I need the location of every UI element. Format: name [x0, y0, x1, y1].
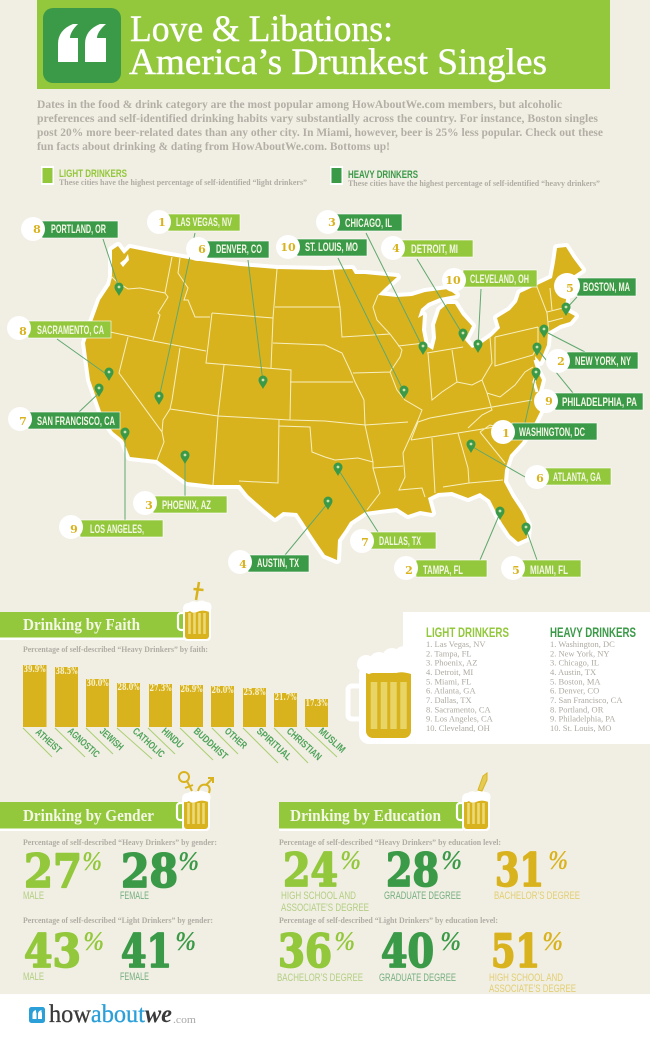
heavy drinkers list: 8. Portland, OR	[550, 704, 604, 714]
label: Atlanta: 6	[536, 472, 544, 485]
stat: 51% high school: %	[542, 926, 563, 956]
label: Phoenix: PHOENIX, AZ	[162, 500, 211, 512]
section heading: drinking by faith: Drinking by Faith	[23, 615, 140, 634]
stat: 51% high school: ASSOCIATE’S DEGREE	[489, 983, 576, 995]
section heading: drinking by gender: Drinking by Gender	[23, 806, 154, 825]
label: Chicago	[316, 210, 402, 234]
label: Austin: AUSTIN, TX	[257, 558, 299, 570]
stat: 36% bachelor: BACHELOR’S DEGREE	[277, 972, 363, 984]
stat: 43% male: 43	[24, 924, 81, 978]
faith subtitle: Percentage of self-described “Heavy Drinkers” by faith:	[23, 645, 208, 654]
bar chart: drinking by faith: 27.3%	[150, 684, 172, 694]
stat: 28% graduate: %	[441, 845, 462, 875]
legend: light drinkers	[41, 166, 307, 187]
stat: 43% male: %	[83, 926, 104, 956]
Chesapeake Bay	[534, 360, 538, 392]
label: San Francisco: 7	[19, 415, 27, 428]
heavy drinkers list: 7. San Francisco, CA	[550, 695, 623, 705]
heavy drinkers list	[550, 624, 636, 733]
stat: 51% high school: 51	[491, 924, 540, 978]
heavy drinkers list: 6. Denver, CO	[550, 686, 599, 696]
stat: 27% male: %	[82, 846, 102, 876]
label: Austin	[228, 550, 309, 574]
label: Dallas: 7	[361, 536, 369, 549]
stat: 40% graduate: 40	[381, 924, 434, 978]
label: Denver	[186, 237, 269, 261]
label: Dallas	[350, 529, 436, 553]
label: Sacramento: SACRAMENTO, CA	[37, 325, 104, 337]
stat: 28% female: %	[178, 846, 199, 876]
stat: 41% female: 41	[121, 924, 172, 978]
map of the United States	[85, 246, 582, 560]
stat: 31% bachelor: %	[548, 845, 568, 875]
label: Chicago: CHICAGO, IL	[345, 218, 392, 230]
section heading: drinking by gender	[0, 802, 184, 831]
heavy drinkers list: 10. St. Louis, MO	[550, 723, 611, 733]
label: Las Vegas	[147, 210, 240, 234]
label: Cleveland: CLEVELAND, OH	[470, 274, 529, 286]
label: Sacramento: 8	[19, 325, 27, 338]
legend: light drinkers: These cities have the highest percentage of self-identified “light drinkers”	[59, 178, 307, 187]
label: St. Louis: 10	[280, 241, 296, 254]
stat: 27% male: 27	[24, 844, 82, 898]
education light drinkers: Percentage of self-described “Light Drinkers” by education level:	[279, 916, 498, 925]
heavy drinkers list: 2. New York, NY	[550, 648, 610, 658]
logo wordmark: howaboutwe	[49, 1001, 172, 1028]
heavy drinkers list: 1. Washington, DC	[550, 639, 615, 649]
stat: 24% high school: %	[340, 845, 361, 875]
bar chart: drinking by faith: BUDDHIST	[191, 726, 230, 762]
stat: 51% high school: HIGH SCHOOL AND	[489, 972, 563, 984]
label: Miami: MIAMI, FL	[530, 565, 568, 577]
label: Cleveland: 10	[445, 274, 461, 287]
gender heavy drinkers: Percentage of self-described “Heavy Drinkers” by gender:	[23, 838, 217, 847]
label: Tampa	[394, 556, 487, 580]
light drinkers list: 9. Los Angeles, CA	[426, 714, 494, 724]
label: Chicago: 3	[328, 216, 336, 229]
intro text: preferences and self-identified drinking habits vary substantially across the country. For instance, Boston singles	[37, 113, 599, 125]
heavy drinkers list: 5. Boston, MA	[550, 676, 601, 686]
stat: 51% high school	[489, 924, 576, 995]
label: Boston	[554, 273, 636, 299]
intro text: Dates in the food & drink category are the most popular among HowAboutWe.com members, but alcoholic	[37, 99, 562, 111]
stat: 24% high school: ASSOCIATE’S DEGREE	[281, 902, 369, 914]
label: New York	[546, 349, 638, 373]
state borders	[110, 257, 567, 510]
stat: 36% bachelor	[277, 924, 363, 984]
label: Portland: PORTLAND, OR	[51, 224, 106, 236]
intro text	[37, 99, 603, 153]
section heading: drinking by education	[279, 802, 463, 831]
section heading: drinking by education: Drinking by Education	[290, 806, 441, 825]
bar chart: drinking by faith: MUSLIM	[316, 726, 347, 756]
bar chart: drinking by faith: 17.3%	[306, 699, 328, 709]
label: Portland: 8	[33, 223, 41, 236]
title: America’s Drunkest Singles	[129, 42, 547, 83]
logo icon	[29, 1007, 45, 1023]
legend: light drinkers: LIGHT DRINKERS	[59, 168, 127, 180]
label: Miami: 5	[512, 564, 520, 577]
bar chart: drinking by faith: ATHEIST	[33, 727, 63, 756]
intro text: fun facts about drinking & dating from HowAboutWe.com. Bottoms up!	[37, 141, 390, 153]
bar chart: drinking by faith: 25.8%	[244, 688, 266, 698]
footer	[0, 994, 650, 1040]
light drinkers list	[426, 624, 509, 733]
title: Love & Libations:	[130, 9, 393, 50]
bar chart: drinking by faith: 38.5%	[56, 667, 78, 677]
label: Sacramento	[7, 316, 111, 340]
gender light drinkers: Percentage of self-described “Light Drinkers” by gender:	[23, 916, 213, 925]
light drinkers list: 1. Las Vegas, NV	[426, 639, 486, 649]
bar chart: drinking by faith: CHRISTIAN	[284, 726, 323, 763]
light drinkers list: 4. Detroit, MI	[426, 667, 473, 677]
light drinkers list: 2. Tampa, FL	[426, 648, 472, 658]
label: New York: 2	[557, 355, 565, 368]
gender heavy drinkers	[23, 838, 217, 902]
bar chart: drinking by faith: 39.9%	[24, 665, 46, 675]
bar chart: drinking by faith	[23, 665, 347, 763]
stat: 31% bachelor	[494, 843, 580, 902]
label: Los Angeles: LOS ANGELES,	[90, 524, 144, 536]
light drinkers list: 5. Miami, FL	[426, 676, 471, 686]
leader lines	[57, 233, 585, 560]
bar chart: drinking by faith: 30.0%	[86, 679, 109, 689]
label: Las Vegas: LAS VEGAS, NV	[176, 217, 232, 229]
bar chart: drinking by faith: OTHER	[222, 726, 249, 752]
label: Denver: DENVER, CO	[216, 244, 262, 256]
map pins	[94, 282, 570, 536]
light drinkers list: 10. Cleveland, OH	[426, 723, 490, 733]
label: Phoenix	[133, 491, 227, 515]
stat: 31% bachelor: 31	[495, 843, 544, 897]
bar chart: drinking by faith: 28.0%	[118, 683, 140, 693]
label: Washington	[491, 420, 597, 444]
stat: 40% graduate: %	[440, 926, 461, 956]
bar chart: drinking by faith: CATHOLIC	[130, 726, 166, 760]
label: Detroit: 4	[392, 242, 400, 255]
stat: 36% bachelor: 36	[278, 924, 332, 978]
stat: 27% male: MALE	[23, 890, 44, 902]
light drinkers list: 6. Atlanta, GA	[426, 686, 476, 696]
label: Las Vegas: 1	[158, 216, 166, 229]
label: Washington: WASHINGTON, DC	[519, 427, 585, 439]
label: Austin: 4	[239, 558, 247, 571]
title	[129, 9, 547, 83]
section heading: drinking by faith	[0, 612, 184, 640]
legend: heavy drinkers: HEAVY DRINKERS	[348, 169, 418, 181]
stat: 24% high school	[281, 843, 369, 914]
bar chart: drinking by faith: 26.9%	[180, 685, 203, 695]
bar chart: drinking by faith: 21.7%	[274, 693, 297, 703]
stat: 41% female: %	[175, 926, 196, 956]
legend: heavy drinkers: These cities have the highest percentage of self-identified “heavy drinkers”	[348, 179, 600, 188]
header banner	[37, 0, 610, 89]
label: Dallas: DALLAS, TX	[379, 536, 421, 548]
label: Detroit	[381, 236, 473, 260]
label: Atlanta: ATLANTA, GA	[553, 472, 601, 484]
heavy drinkers list: 4. Austin, TX	[550, 667, 596, 677]
education heavy drinkers: Percentage of self-described “Heavy Drinkers” by education level:	[279, 838, 501, 847]
heavy drinkers list: 3. Chicago, IL	[550, 658, 599, 668]
icon: beer mug with gender symbols	[177, 772, 213, 831]
stat: 28% female: 28	[121, 844, 178, 898]
label: San Francisco: SAN FRANCISCO, CA	[37, 416, 115, 428]
logo domain: .com	[173, 1014, 196, 1026]
label: St. Louis	[276, 235, 367, 259]
light drinkers list: 7. Dallas, TX	[426, 695, 472, 705]
education heavy drinkers	[279, 838, 580, 914]
label: Philadelphia	[534, 389, 643, 413]
stat: 43% male: MALE	[23, 971, 44, 983]
stat: 31% bachelor: BACHELOR’S DEGREE	[494, 890, 580, 902]
icon: quotation marks	[43, 8, 121, 83]
education light drinkers	[277, 916, 576, 995]
label: Portland	[21, 217, 118, 241]
label: Tampa: 2	[405, 564, 413, 577]
icon: beer mug with cross	[178, 582, 212, 641]
label: Philadelphia: 9	[545, 395, 553, 408]
panel: top ten lists	[348, 612, 650, 744]
gender light drinkers	[23, 916, 213, 983]
bar chart: drinking by faith: AGNOSTIC	[65, 726, 101, 760]
stat: 24% high school: 24	[283, 843, 338, 897]
icon: beer mug with pencil	[457, 773, 491, 831]
light drinkers list: 3. Phoenix, AZ	[426, 658, 477, 668]
stat: 41% female: FEMALE	[120, 971, 149, 983]
label: Boston: 5	[566, 282, 574, 295]
light drinkers list: LIGHT DRINKERS	[426, 624, 509, 640]
label: Atlanta	[525, 465, 611, 489]
bar chart: drinking by faith: SPIRITUAL	[254, 726, 293, 763]
bar chart: drinking by faith: 26.0%	[212, 686, 234, 696]
label: Cleveland	[442, 268, 537, 292]
Puget Sound	[120, 254, 129, 267]
label: Miami	[501, 556, 581, 580]
intro text: post 20% more beer-related dates than any other city. In Miami, however, beer is 25% less popular. Check out these	[37, 127, 603, 139]
icon: large beer mug	[348, 646, 420, 744]
label: Washington: 1	[502, 427, 510, 440]
label: Los Angeles: 9	[70, 523, 78, 536]
label: Detroit: DETROIT, MI	[411, 244, 458, 256]
label: Tampa: TAMPA, FL	[423, 565, 463, 577]
stat: 28% female: FEMALE	[120, 890, 149, 902]
light drinkers list: 8. Sacramento, CA	[426, 704, 492, 714]
label: San Francisco	[8, 407, 120, 431]
stat: 40% graduate: GRADUATE DEGREE	[379, 972, 456, 984]
label: St. Louis: ST. LOUIS, MO	[305, 242, 358, 254]
label: Los Angeles	[59, 515, 163, 539]
stat: 36% bachelor: %	[334, 926, 355, 956]
stat: 28% graduate: 28	[386, 843, 439, 897]
label: Denver: 6	[198, 243, 206, 256]
stat: 24% high school: HIGH SCHOOL AND	[281, 890, 356, 902]
legend: heavy drinkers	[330, 166, 600, 188]
heavy drinkers list: 9. Philadelphia, PA	[550, 714, 616, 724]
stat: 28% graduate: GRADUATE DEGREE	[384, 890, 461, 902]
label: Phoenix: 3	[145, 499, 153, 512]
bar chart: drinking by faith: HINDU	[159, 726, 185, 751]
bar chart: drinking by faith: JEWISH	[97, 726, 125, 753]
